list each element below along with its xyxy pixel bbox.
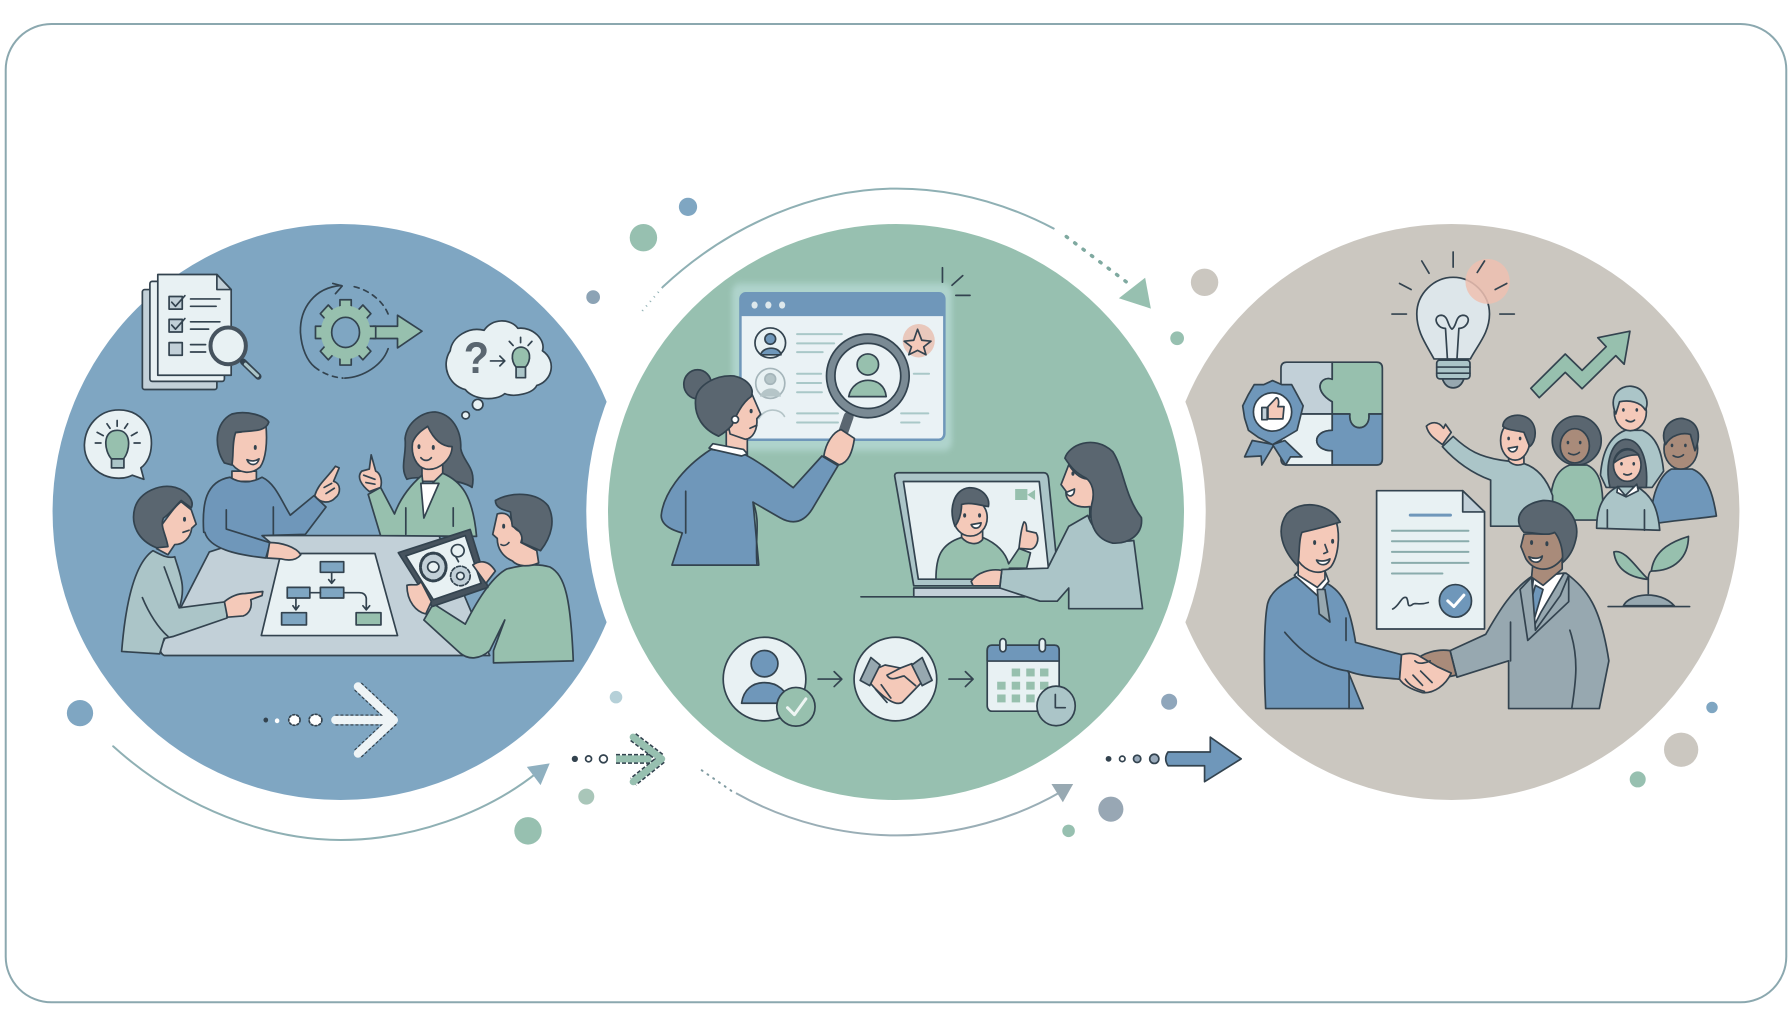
backdrop circle: stage 2: [608, 224, 1184, 800]
panel: stage 3 agreement and growth: [1243, 252, 1716, 709]
icon: calendar with clock: [987, 639, 1075, 726]
contract document: [1377, 491, 1485, 629]
icon: magnifier on candidate: [827, 334, 909, 438]
person: woman interviewer: [971, 442, 1143, 609]
person: back man light hair: [1600, 386, 1664, 487]
panel: stage 1 team planning: [84, 274, 573, 753]
person: waving man: [1426, 415, 1553, 526]
curved arrow under stage 1: [113, 746, 550, 840]
icon: lightbulb speech bubble: [84, 410, 151, 479]
connector arrow: stage 2 to 3: [1107, 737, 1241, 782]
arrow: handshake to calendar: [949, 672, 973, 687]
panel: stage 2 candidate search and interview: [661, 268, 1143, 726]
white ring around stage 2: [586, 202, 1206, 822]
icon: growth arrow: [1531, 331, 1630, 398]
person: front woman: [1597, 439, 1660, 530]
laptop with video call: [861, 473, 1059, 597]
curved arrow over stage 2: [642, 189, 1151, 311]
person: woman in pale sweater: [122, 486, 263, 654]
icon: candidate approved: [723, 637, 815, 726]
backdrop circle: stage 3: [1163, 224, 1739, 800]
icon: favourite star: [903, 268, 970, 357]
window glow: [732, 284, 952, 451]
arrow: approved to handshake: [818, 672, 842, 687]
person: woman recruiter with magnifier: [661, 370, 854, 565]
crowd of colleagues: [1426, 386, 1716, 530]
plant seedling: [1608, 536, 1690, 607]
person: man in blue sweater: [203, 413, 339, 560]
backdrop circle: stage 1: [53, 224, 629, 800]
table with flowchart: [160, 536, 490, 656]
icon: gear with arrow: [300, 283, 422, 378]
person: woman in green jacket: [359, 412, 477, 536]
person: man with tablet: [398, 494, 573, 663]
icon: large lightbulb: [1392, 252, 1514, 388]
icon: handshake of two men: [1400, 650, 1456, 693]
decorative dots: [67, 198, 1718, 845]
person: man in grey suit: [1450, 500, 1609, 709]
connector arrow: stage 1 to 2: [573, 737, 662, 782]
person: right man in blue: [1651, 418, 1716, 524]
icon: puzzle with award rosette: [1243, 362, 1382, 465]
person: man in blue shaking hands: [1264, 505, 1401, 709]
arrow: dashed white progress arrow: [264, 687, 394, 753]
candidate browser window: [740, 293, 944, 440]
icon: thought cloud: [446, 321, 551, 419]
icon: thought cloud: ?: [464, 334, 489, 384]
icon: checklist documents: [142, 274, 258, 390]
person: woman with curly hair: [1550, 416, 1603, 520]
curved arrow under stage 2: [702, 770, 1073, 835]
icon: handshake: [854, 637, 937, 721]
